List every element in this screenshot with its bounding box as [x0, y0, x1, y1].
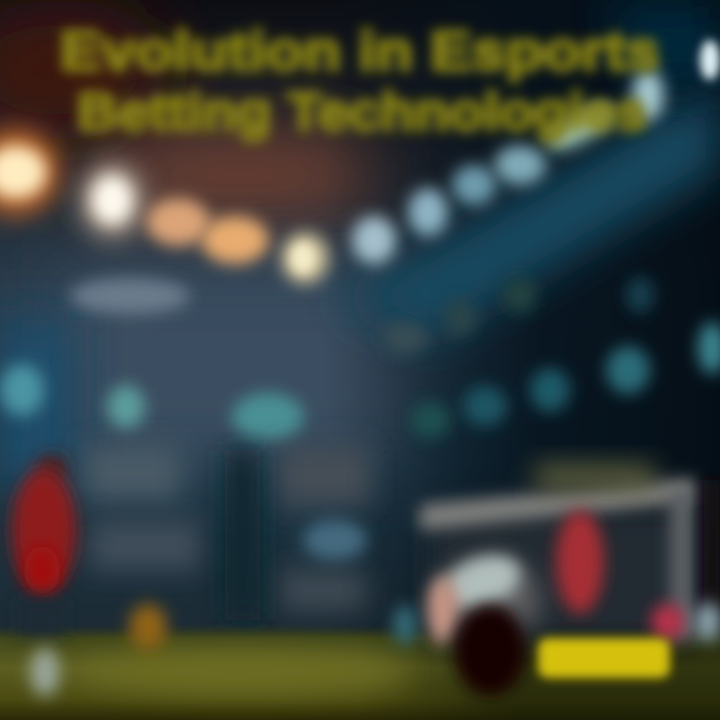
- lower stands: grey blocks: [85, 445, 370, 620]
- floodlights: warm row on the left: [0, 128, 329, 284]
- title: [60, 19, 660, 142]
- stand lights: teal spots: [0, 277, 720, 441]
- large foreground ball: [393, 546, 540, 696]
- goalkeeper in red: [556, 510, 604, 614]
- title: Evolution in Esports: [60, 19, 660, 82]
- yellow banner: [538, 638, 670, 678]
- corner light: white: [694, 602, 720, 642]
- goal frame: [420, 465, 720, 640]
- red flag marker by the goal: [651, 604, 685, 640]
- ball: orange: [129, 604, 167, 650]
- pitch: [0, 625, 720, 720]
- floodlights: cool row on the right: [352, 40, 720, 264]
- ball: white on pitch: [30, 648, 60, 696]
- title: Betting Technologies: [77, 82, 647, 142]
- player in red: [12, 454, 76, 635]
